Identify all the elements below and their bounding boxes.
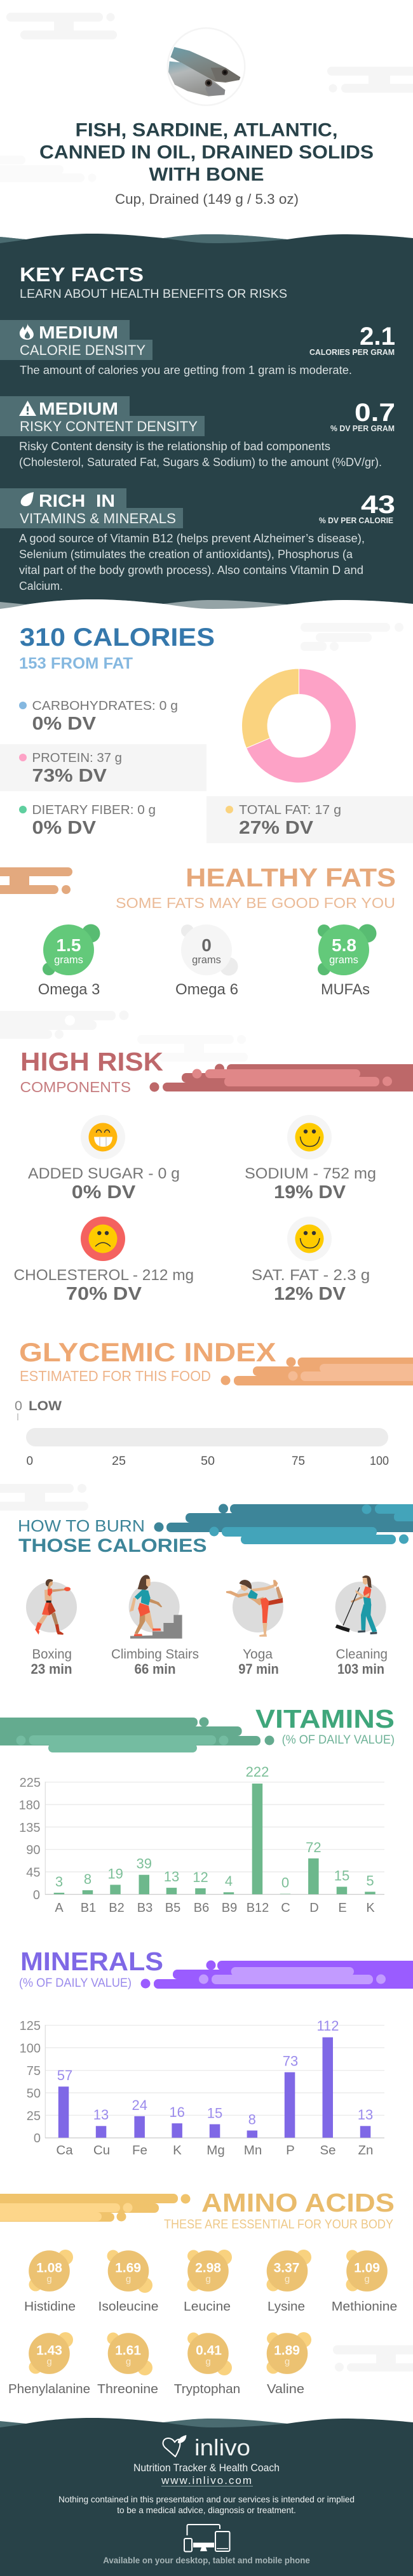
x axis labels: B3 (137, 1901, 152, 1915)
y axis labels: 0 (34, 2132, 41, 2146)
x axis labels: Cu (93, 2143, 110, 2158)
amino acid: valine: Valine (267, 2382, 304, 2396)
amino acid: lysine (267, 2250, 311, 2314)
fact: rich in vitamins and minerals: Selenium (stimulates the creation of antioxidants), Phosphorus (a (19, 547, 353, 561)
fact: risky content density: MEDIUM (39, 399, 118, 418)
gauge scale (27, 1455, 389, 1468)
decorative header shape (0, 1717, 274, 1752)
x axis labels: B2 (109, 1901, 125, 1915)
wave bottom edge (0, 599, 413, 619)
y axis labels: 225 (20, 1776, 41, 1790)
amino acid: histidine: g (46, 2274, 52, 2285)
gauge bar (26, 1428, 388, 1446)
value labels: 73 (283, 2053, 298, 2069)
value labels: 16 (169, 2104, 185, 2120)
y axis labels: 90 (26, 1843, 41, 1857)
item: added sugar: ADDED SUGAR - 0 g (28, 1165, 180, 1182)
x axis labels: Se (320, 2143, 336, 2158)
food image: fish (168, 47, 240, 97)
logo wordmark: inlivo (194, 2434, 250, 2460)
x axis labels: P (286, 2143, 295, 2158)
fact: rich in vitamins and minerals: % DV PER CALORIE (319, 516, 393, 525)
background cloud lower left (0, 156, 97, 182)
activity: boxing: Boxing (32, 1647, 72, 1662)
legend: total fat: 27% DV (239, 818, 314, 838)
icon: person in yoga pose (226, 1580, 283, 1637)
y axis labels: 75 (27, 2064, 41, 2078)
food image ring (168, 28, 245, 105)
x axis labels: D (309, 1901, 319, 1915)
value labels: 57 (57, 2067, 72, 2083)
fact: calorie density: The amount of calories you are getting from 1 gram is moderate. (20, 363, 352, 377)
badge: omega 3: grams (54, 954, 83, 966)
icon: person sweeping (335, 1575, 386, 1634)
grid lines (45, 1782, 384, 1895)
wave background (0, 2418, 413, 2576)
amino acid: lysine: Lysine (267, 2300, 305, 2314)
heading: MINERALS (20, 1947, 163, 1976)
x axis labels: E (338, 1901, 347, 1915)
fact: calorie density: MEDIUM (39, 323, 118, 342)
decorative header shape (0, 2194, 191, 2222)
icon: frowning face (89, 1224, 117, 1253)
value labels: 8 (84, 1871, 91, 1887)
legend: dietary fiber: 0% DV (32, 818, 97, 838)
background clouds (0, 1011, 248, 1062)
disclaimer (58, 2494, 355, 2515)
amino acid: lysine: 3.37 (274, 2261, 299, 2276)
availability note: Available on your desktop, tablet and mobile phone (103, 2555, 310, 2565)
fact: rich in vitamins and minerals: A good source of Vitamin B12 (helps prevent Alzheimer’s disease), (19, 531, 365, 545)
x axis labels: Zn (358, 2143, 373, 2158)
activity: cleaning: Cleaning (336, 1647, 388, 1662)
amino acid: isoleucine (98, 2250, 159, 2314)
amino acid: leucine: Leucine (184, 2300, 231, 2314)
legend: protein: PROTEIN: 37 g (32, 751, 122, 765)
value labels: 8 (248, 2111, 256, 2127)
amino acid: phenylalanine: 1.43 (36, 2344, 62, 2358)
fact: risky content density: (Cholesterol, Saturated Fat, Sugars & Sodium) to the amount (%DV/gr). (19, 455, 382, 469)
amino acid: phenylalanine: Phenylalanine (8, 2382, 90, 2396)
title (39, 119, 374, 185)
amino acid: threonine: 1.61 (115, 2344, 141, 2358)
item: sodium: SODIUM - 752 mg (245, 1165, 376, 1182)
panel: calories (0, 623, 413, 843)
y axis labels: 180 (19, 1798, 40, 1812)
website link: www.inlivo.com (161, 2474, 252, 2486)
y axis labels: 25 (27, 2109, 41, 2123)
panel: amino acids (0, 2188, 413, 2396)
amino acid: leucine (184, 2250, 232, 2314)
fact: rich in vitamins and minerals: VITAMINS & MINERALS (20, 511, 176, 526)
badge: omega 6: 0 (201, 935, 212, 955)
fact: risky content density: RISKY CONTENT DENSITY (20, 418, 198, 434)
serving size: Cup, Drained (149 g / 5.3 oz) (115, 191, 299, 207)
fact: risky content density: % DV PER GRAM (330, 424, 395, 433)
subheading: 153 FROM FAT (19, 655, 133, 672)
amino acid: valine: 1.89 (274, 2344, 300, 2358)
amino acid: tryptophan: Tryptophan (174, 2382, 240, 2396)
gauge scale: 25 (112, 1455, 126, 1468)
decorative header shape (150, 1064, 413, 1092)
disclaimer: to be a medical advice, diagnosis or treatment. (117, 2505, 296, 2515)
subheading: LEARN ABOUT HEALTH BENEFITS OR RISKS (20, 287, 287, 301)
bar chart: vitamins (19, 1764, 384, 1915)
activity: yoga: 97 min (238, 1661, 279, 1677)
amino acid: tryptophan: g (205, 2356, 211, 2367)
value labels: 4 (225, 1873, 233, 1889)
fact: risky content density (0, 396, 395, 469)
subheading: (% OF DAILY VALUE) (282, 1733, 395, 1747)
index marker (15, 1399, 62, 1420)
subheading: ESTIMATED FOR THIS FOOD (20, 1368, 211, 1384)
fact: risky content density: 0.7 (355, 399, 395, 427)
heading: KEY FACTS (20, 263, 144, 286)
legend: protein: 73% DV (32, 766, 107, 786)
subheading: SOME FATS MAY BE GOOD FOR YOU (116, 895, 395, 911)
heading: HEALTHY FATS (186, 863, 396, 892)
fact: rich in vitamins and minerals: Calcium. (19, 579, 63, 592)
icon: flame (20, 323, 34, 340)
background cloud (301, 623, 403, 651)
legend: dietary fiber (19, 803, 156, 838)
heading: GLYCEMIC INDEX (19, 1337, 276, 1367)
background cloud (0, 1484, 88, 1511)
legend: carbohydrates: CARBOHYDRATES: 0 g (32, 699, 178, 713)
activity: climbing stairs: Climbing Stairs (111, 1647, 199, 1662)
activity: climbing stairs: 66 min (135, 1661, 175, 1677)
activity: cleaning (335, 1575, 388, 1677)
activity: boxing: 23 min (30, 1661, 72, 1677)
x axis labels: B6 (194, 1901, 209, 1915)
x axis labels: B9 (222, 1901, 237, 1915)
heading: AMINO ACIDS (201, 2188, 395, 2217)
index marker: 0 (15, 1399, 22, 1413)
amino acid: methionine: 1.09 (354, 2261, 380, 2276)
gauge scale: 75 (292, 1455, 305, 1468)
badge: omega 3: 1.5 (57, 935, 81, 955)
panel: minerals (19, 1947, 413, 2158)
x axis labels: K (366, 1901, 375, 1915)
amino acid: isoleucine: Isoleucine (98, 2300, 159, 2314)
decorative header shape (154, 1504, 413, 1544)
fact: rich in vitamins and minerals: RICH IN (39, 491, 115, 511)
activity: climbing stairs (111, 1575, 199, 1677)
tagline: Nutrition Tracker & Health Coach (133, 2462, 280, 2474)
panel: glycemic index (15, 1337, 413, 1468)
item: added sugar: 0% DV (72, 1182, 136, 1203)
activity: boxing (26, 1579, 77, 1677)
logo icon: heart with leaf (163, 2435, 186, 2457)
item: added sugar (28, 1115, 180, 1203)
background cloud right (327, 67, 413, 93)
y axis labels (20, 2019, 41, 2146)
amino acid: lysine: g (285, 2274, 290, 2285)
item: saturated fat: SAT. FAT - 2.3 g (252, 1267, 370, 1284)
badge: omega 3: Omega 3 (38, 981, 100, 998)
fact: rich in vitamins and minerals: vital part of the body growth process). Also contains Vitamin D and (19, 563, 363, 577)
subheading: COMPONENTS (20, 1079, 131, 1095)
item: cholesterol (14, 1217, 194, 1304)
icon: desktop, tablet and phone (184, 2525, 230, 2551)
decorative header shape (221, 1358, 413, 1385)
gauge scale: 50 (201, 1455, 215, 1468)
title: CANNED IN OIL, DRAINED SOLIDS (39, 142, 374, 163)
badge: omega 6: Omega 6 (175, 981, 238, 998)
amino acid: histidine: Histidine (24, 2300, 76, 2314)
panel: healthy fats (0, 863, 396, 998)
amino acid: phenylalanine (8, 2332, 90, 2396)
y axis labels: 45 (26, 1865, 41, 1879)
badge: MUFAs: MUFAs (321, 981, 370, 998)
value labels (55, 1764, 374, 1891)
fact: calorie density: CALORIES PER GRAM (309, 347, 395, 357)
icon: leaf (21, 492, 34, 506)
badge: MUFAs (318, 924, 376, 998)
x axis labels: B12 (247, 1901, 269, 1915)
amino acid: phenylalanine: g (46, 2356, 52, 2367)
subheading: (% OF DAILY VALUE) (19, 1977, 132, 1990)
gauge scale: 0 (27, 1455, 33, 1468)
decorative header shape (141, 1961, 413, 1989)
value labels: 0 (281, 1874, 289, 1891)
y axis labels: 50 (27, 2086, 41, 2100)
gauge scale: 100 (370, 1455, 389, 1468)
x axis labels: K (173, 2143, 182, 2158)
value labels: 24 (132, 2097, 147, 2113)
decorative header shape (0, 867, 72, 894)
icon: person climbing stairs (129, 1575, 182, 1639)
x axis labels: A (55, 1901, 64, 1915)
amino acid: threonine: g (126, 2356, 131, 2367)
amino acid: tryptophan: 0.41 (196, 2344, 222, 2358)
value labels: 3 (55, 1874, 63, 1890)
y axis labels (19, 1776, 41, 1902)
heading line 2: THOSE CALORIES (18, 1535, 207, 1556)
value labels (57, 2018, 373, 2127)
value labels: 5 (366, 1872, 374, 1888)
legend: protein (19, 751, 122, 786)
value labels: 19 (107, 1865, 123, 1881)
index marker: LOW (29, 1399, 62, 1413)
background cloud (333, 2346, 413, 2372)
amino acid: leucine: 2.98 (195, 2261, 221, 2276)
value labels: 13 (164, 1869, 179, 1885)
legend band backgrounds (0, 744, 413, 843)
amino acid: methionine: g (364, 2274, 370, 2285)
legend: carbohydrates: 0% DV (32, 714, 97, 734)
fact: calorie density: 2.1 (360, 323, 395, 350)
grid lines (45, 2025, 384, 2138)
value labels: 112 (316, 2018, 339, 2034)
badge: MUFAs: 5.8 (332, 935, 356, 955)
amino acid: threonine (97, 2333, 158, 2396)
title: FISH, SARDINE, ATLANTIC, (75, 119, 338, 141)
y axis labels: 100 (20, 2042, 41, 2056)
heading line 1: HOW TO BURN (18, 1516, 145, 1535)
amino acid: histidine (24, 2250, 76, 2314)
amino acid: valine (267, 2332, 311, 2396)
bar chart: minerals (20, 2018, 384, 2158)
x axis labels: B1 (81, 1901, 96, 1915)
amino acid: methionine: Methionine (332, 2300, 397, 2314)
value labels: 15 (207, 2106, 222, 2121)
amino acid: histidine: 1.08 (36, 2261, 62, 2276)
panel: key facts (0, 234, 413, 619)
x axis labels: B5 (165, 1901, 180, 1915)
y axis labels: 135 (19, 1821, 41, 1835)
item: sodium (245, 1115, 376, 1203)
activity: yoga (226, 1580, 283, 1677)
legend: carbohydrates (19, 699, 178, 734)
item: sodium: 19% DV (274, 1182, 346, 1203)
value labels: 72 (306, 1839, 322, 1855)
activity: yoga: Yoga (243, 1647, 273, 1662)
bars (54, 1784, 376, 1894)
legend: total fat (226, 803, 341, 838)
y axis labels: 0 (33, 1888, 40, 1902)
fact: rich in vitamins and minerals: 43 (361, 491, 395, 519)
item: saturated fat (252, 1217, 370, 1304)
icon: grinning face (89, 1123, 117, 1152)
legend: dietary fiber: DIETARY FIBER: 0 g (32, 803, 156, 817)
panel: vitamins (0, 1704, 395, 1915)
icon: smiling face (295, 1123, 324, 1152)
x axis labels: C (281, 1901, 290, 1915)
badge: omega 6: grams (192, 954, 221, 966)
amino acid: isoleucine: g (126, 2274, 131, 2285)
value labels: 39 (137, 1856, 152, 1872)
heading: VITAMINS (255, 1704, 395, 1733)
legend: total fat: TOTAL FAT: 17 g (239, 803, 341, 817)
amino acid: leucine: g (205, 2274, 211, 2285)
amino acid: tryptophan (174, 2333, 240, 2396)
fact: calorie density: CALORIE DENSITY (20, 342, 146, 358)
icon: smiling face (295, 1224, 324, 1253)
item: saturated fat: 12% DV (274, 1284, 346, 1304)
value labels: 13 (93, 2107, 109, 2123)
x axis labels (56, 2143, 373, 2158)
y axis labels: 125 (20, 2019, 41, 2033)
wave background (0, 234, 413, 606)
badge: MUFAs: grams (329, 954, 358, 966)
fact: risky content density: Risky Content density is the relationship of bad components (19, 439, 330, 453)
fact: rich in vitamins and minerals (0, 488, 395, 592)
heading: 310 CALORIES (20, 624, 215, 651)
header panel (0, 13, 413, 207)
badge: omega 3 (38, 924, 100, 998)
x axis labels: Mg (207, 2143, 225, 2158)
panel: how to burn those calories (0, 1484, 413, 1677)
value labels: 222 (246, 1764, 269, 1780)
title: WITH BONE (149, 164, 264, 185)
item: cholesterol: 70% DV (66, 1284, 142, 1304)
value labels: 15 (334, 1868, 349, 1883)
amino acid: methionine (332, 2250, 397, 2314)
badge: omega 6 (175, 924, 238, 998)
item: cholesterol: CHOLESTEROL - 212 mg (14, 1267, 194, 1284)
value labels: 13 (358, 2107, 373, 2123)
bars (58, 2038, 370, 2138)
amino acid: isoleucine: 1.69 (115, 2261, 141, 2276)
x axis labels: Mn (244, 2143, 262, 2158)
panel: high risk components (0, 1011, 413, 1304)
disclaimer: Nothing contained in this presentation and our services is intended or implied (58, 2494, 355, 2504)
amino acid: valine: g (285, 2356, 290, 2367)
icon: boxer (26, 1579, 77, 1635)
background cloud left (6, 13, 117, 39)
activity: cleaning: 103 min (337, 1661, 384, 1677)
panel: footer (0, 2418, 413, 2576)
fact: calorie density (0, 320, 395, 377)
value labels: 12 (193, 1869, 208, 1885)
icon: warning triangle (19, 401, 36, 416)
amino acid: threonine: Threonine (97, 2382, 158, 2396)
x axis labels (55, 1901, 375, 1915)
x axis labels: Ca (56, 2143, 73, 2158)
x axis labels: Fe (132, 2143, 147, 2158)
heading: HIGH RISK (20, 1047, 163, 1076)
donut chart (241, 669, 356, 783)
